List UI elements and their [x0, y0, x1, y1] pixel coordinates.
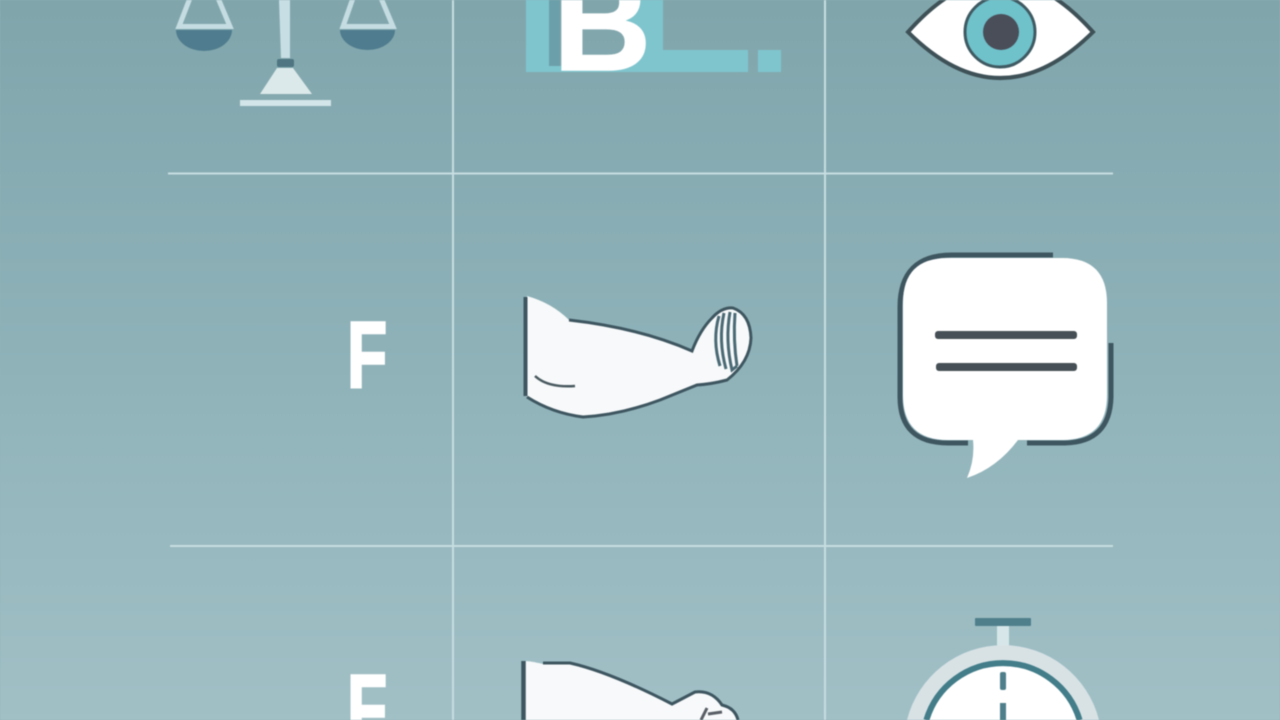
letter F, middle row: F	[347, 304, 387, 408]
icon: forearm with open hand	[526, 296, 751, 417]
icon: stopwatch	[906, 618, 1100, 720]
icon: speech bubble	[900, 255, 1111, 478]
icon: eye	[905, 0, 1096, 81]
icon: forearm with fist	[520, 660, 740, 720]
icon: balance scales	[175, 0, 397, 106]
icon: letter B logo	[526, 0, 782, 99]
